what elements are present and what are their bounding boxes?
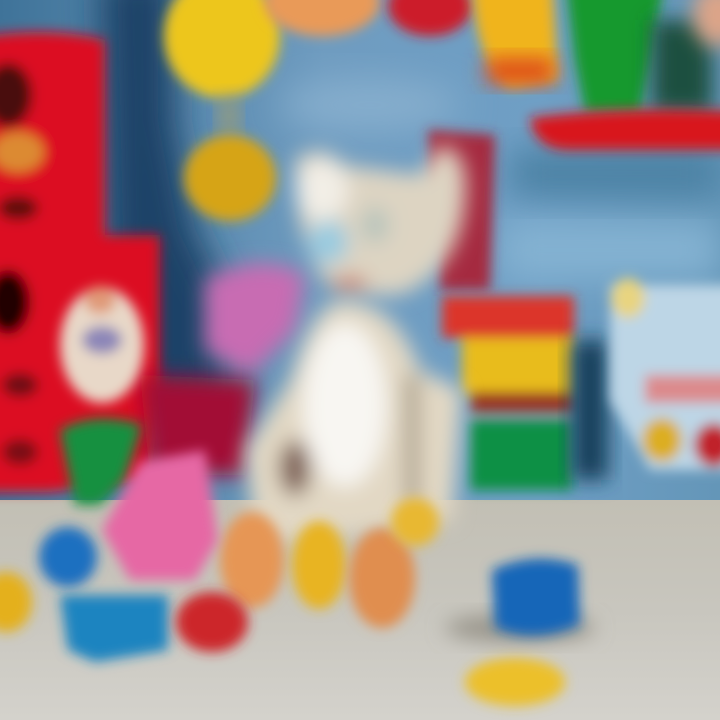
pink block	[102, 450, 218, 580]
white bear	[245, 145, 466, 540]
snowman toy	[60, 286, 144, 403]
orange foot left	[220, 512, 284, 608]
yellow block floor	[465, 658, 565, 706]
green toy	[60, 419, 142, 505]
light wall patch	[280, 79, 460, 131]
blue ball left	[39, 527, 97, 587]
stacked blocks	[442, 296, 574, 490]
peach corner	[692, 0, 720, 47]
yellow foot	[292, 521, 346, 609]
tower holes	[0, 63, 44, 465]
lower right wall patch	[500, 220, 720, 280]
yellow block left	[0, 572, 32, 632]
background wall	[0, 0, 720, 510]
yellow toy top	[472, 0, 558, 88]
red tower	[0, 32, 160, 492]
green toy top	[565, 0, 665, 112]
amber ball	[184, 135, 276, 221]
bear ears and head	[295, 145, 466, 295]
wall shadow under shelf	[510, 150, 720, 196]
orange base of yellow toy	[486, 58, 554, 84]
blue block right	[492, 559, 580, 636]
balloon string	[220, 98, 238, 134]
red toy top	[388, 0, 472, 36]
blue block	[60, 595, 168, 662]
floor	[0, 500, 720, 720]
yellow foot small	[391, 498, 439, 546]
red block	[176, 592, 248, 652]
picture card	[610, 278, 720, 470]
orange toy top	[264, 0, 380, 36]
orange foot right	[349, 528, 415, 628]
dark shadow behind tower	[100, 0, 225, 410]
yellow balloon	[164, 0, 280, 98]
bear body	[245, 300, 462, 540]
pink toy	[205, 264, 305, 375]
red shelf	[530, 110, 720, 150]
dark right top	[652, 20, 712, 112]
floor shadow under blue block	[445, 614, 595, 642]
dark block shadow	[572, 340, 608, 480]
red panel behind bear	[428, 130, 495, 290]
crimson toy	[140, 375, 255, 475]
